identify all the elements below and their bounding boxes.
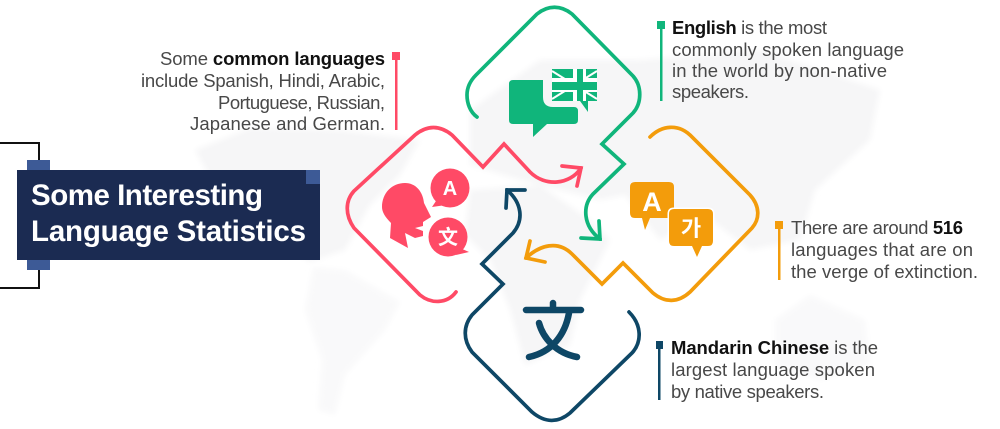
icon: orange translation bubbles: A [642, 187, 662, 217]
title text: Some Interesting [31, 179, 263, 212]
text block: the verge of extinction. [791, 261, 978, 282]
icon: English speech bubble and flag [509, 69, 597, 137]
text block: There are around 516 [791, 217, 963, 238]
text block: include Spanish, Hindi, Arabic, [141, 70, 385, 91]
text block: speakers. [672, 81, 749, 102]
text block: commonly spoken language [672, 39, 904, 60]
callout: common languages [141, 48, 400, 134]
head [382, 183, 431, 248]
icon: orange translation bubbles: 가 [681, 211, 701, 243]
text block: in the world by non-native [672, 60, 887, 81]
letter bubble wen: 文 [438, 221, 458, 250]
icon: orange translation bubbles [630, 182, 713, 257]
title panel [0, 143, 320, 288]
top accent square [27, 160, 50, 171]
title text: Language Statistics [31, 215, 306, 248]
text block: Portuguese, Russian, [218, 92, 385, 113]
ga bubble [669, 209, 713, 257]
letter bubble A: A [443, 178, 457, 200]
text block: Japanese and German. [190, 113, 385, 134]
text block: Some common languages [160, 48, 385, 69]
text block: languages that are on [791, 239, 973, 260]
text block: by native speakers. [671, 381, 824, 402]
background world map [195, 50, 880, 415]
bubble [509, 80, 578, 137]
orange marker [775, 221, 783, 280]
navy loop arrow [465, 190, 639, 420]
flag [552, 69, 597, 112]
bottom accent square [27, 259, 50, 270]
black bracket lines [0, 143, 39, 288]
A bubble [630, 182, 674, 230]
text block: largest language spoken [671, 359, 875, 380]
green marker [657, 21, 665, 101]
callout: Mandarin [656, 337, 878, 402]
icon: navy wen character [526, 303, 581, 357]
corner accent square [306, 170, 320, 184]
red loop arrow [347, 128, 581, 301]
callout: English [657, 17, 904, 102]
navy marker [656, 341, 663, 400]
text block: English is the most [672, 17, 827, 38]
callout: 516 languages [775, 217, 978, 282]
icon: speaking head with letters [382, 168, 470, 256]
red marker [392, 52, 400, 130]
orange loop arrow [526, 127, 758, 300]
title background [17, 170, 320, 260]
text block: Mandarin Chinese is the [671, 337, 878, 358]
green loop arrow [467, 7, 640, 239]
